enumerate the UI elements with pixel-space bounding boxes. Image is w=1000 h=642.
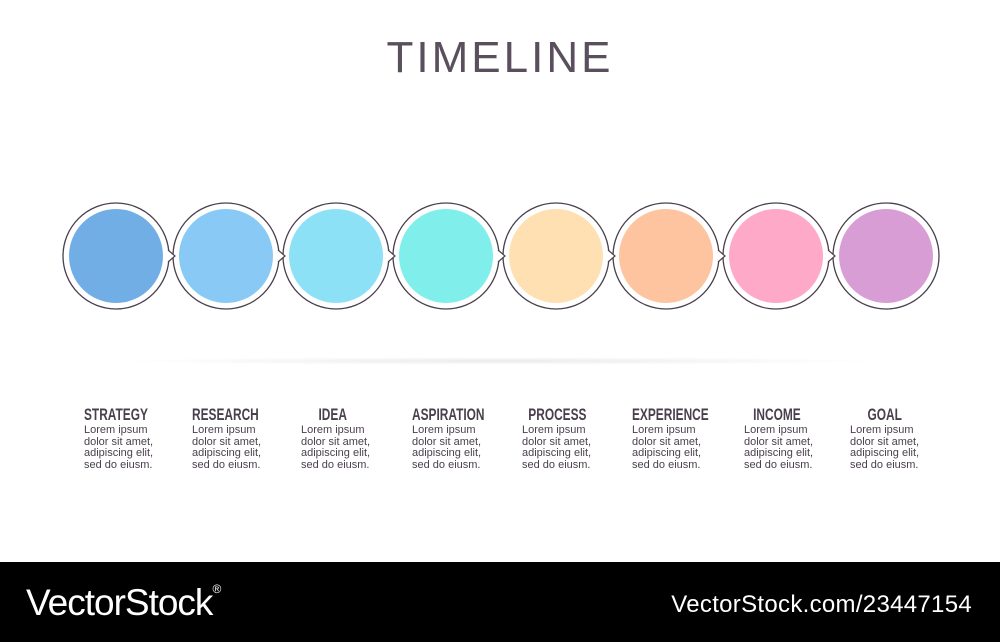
label: aspiration: sed do eiusm.: [412, 458, 480, 470]
label: idea: adipiscing elit,: [301, 447, 370, 459]
label: experience: EXPERIENCE: [632, 405, 709, 424]
label: idea: [301, 405, 370, 470]
label: strategy: adipiscing elit,: [84, 447, 153, 459]
arrow notches: [168, 250, 835, 262]
label: research: Lorem ipsum: [192, 424, 256, 436]
label: process: PROCESS: [528, 405, 586, 424]
label: research: RESEARCH: [192, 405, 259, 424]
title: TIMELINE: [387, 33, 613, 82]
label: aspiration: Lorem ipsum: [412, 424, 476, 436]
label: goal: GOAL: [868, 405, 902, 424]
label: aspiration: adipiscing elit,: [412, 447, 481, 459]
label: idea: IDEA: [318, 405, 347, 424]
label: strategy: sed do eiusm.: [84, 458, 152, 470]
shadow: [120, 357, 880, 365]
label: aspiration: dolor sit amet,: [412, 436, 481, 448]
label: goal: dolor sit amet,: [850, 436, 919, 448]
footer logo: VectorStock®: [26, 582, 220, 623]
footer: [0, 562, 1000, 642]
label: aspiration: ASPIRATION: [412, 405, 485, 424]
label: strategy: [84, 405, 153, 470]
label: experience: sed do eiusm.: [632, 458, 700, 470]
label: goal: [850, 405, 919, 470]
label: idea: sed do eiusm.: [301, 458, 369, 470]
label: strategy: dolor sit amet,: [84, 436, 153, 448]
label: idea: dolor sit amet,: [301, 436, 370, 448]
label: experience: Lorem ipsum: [632, 424, 696, 436]
label: research: dolor sit amet,: [192, 436, 261, 448]
label: income: dolor sit amet,: [744, 436, 813, 448]
label: income: sed do eiusm.: [744, 458, 812, 470]
label: experience: dolor sit amet,: [632, 436, 701, 448]
label: process: [522, 405, 591, 470]
label: goal: adipiscing elit,: [850, 447, 919, 459]
label: experience: adipiscing elit,: [632, 447, 701, 459]
footer id: VectorStock.com/23447154: [671, 591, 972, 618]
label: research: sed do eiusm.: [192, 458, 260, 470]
circle fills: [69, 209, 163, 303]
label: idea: Lorem ipsum: [301, 424, 365, 436]
label: process: adipiscing elit,: [522, 447, 591, 459]
label: income: [744, 405, 813, 470]
label: income: adipiscing elit,: [744, 447, 813, 459]
label: process: sed do eiusm.: [522, 458, 590, 470]
circles chain: [62, 202, 940, 364]
label: strategy: STRATEGY: [84, 405, 148, 424]
label: income: Lorem ipsum: [744, 424, 808, 436]
label: process: dolor sit amet,: [522, 436, 591, 448]
label: goal: Lorem ipsum: [850, 424, 914, 436]
label: strategy: Lorem ipsum: [84, 424, 148, 436]
label: goal: sed do eiusm.: [850, 458, 918, 470]
label: research: adipiscing elit,: [192, 447, 261, 459]
label: research: [192, 405, 261, 470]
label: experience: [632, 405, 709, 470]
label: income: INCOME: [753, 405, 801, 424]
label: process: Lorem ipsum: [522, 424, 586, 436]
label: aspiration: [412, 405, 485, 470]
